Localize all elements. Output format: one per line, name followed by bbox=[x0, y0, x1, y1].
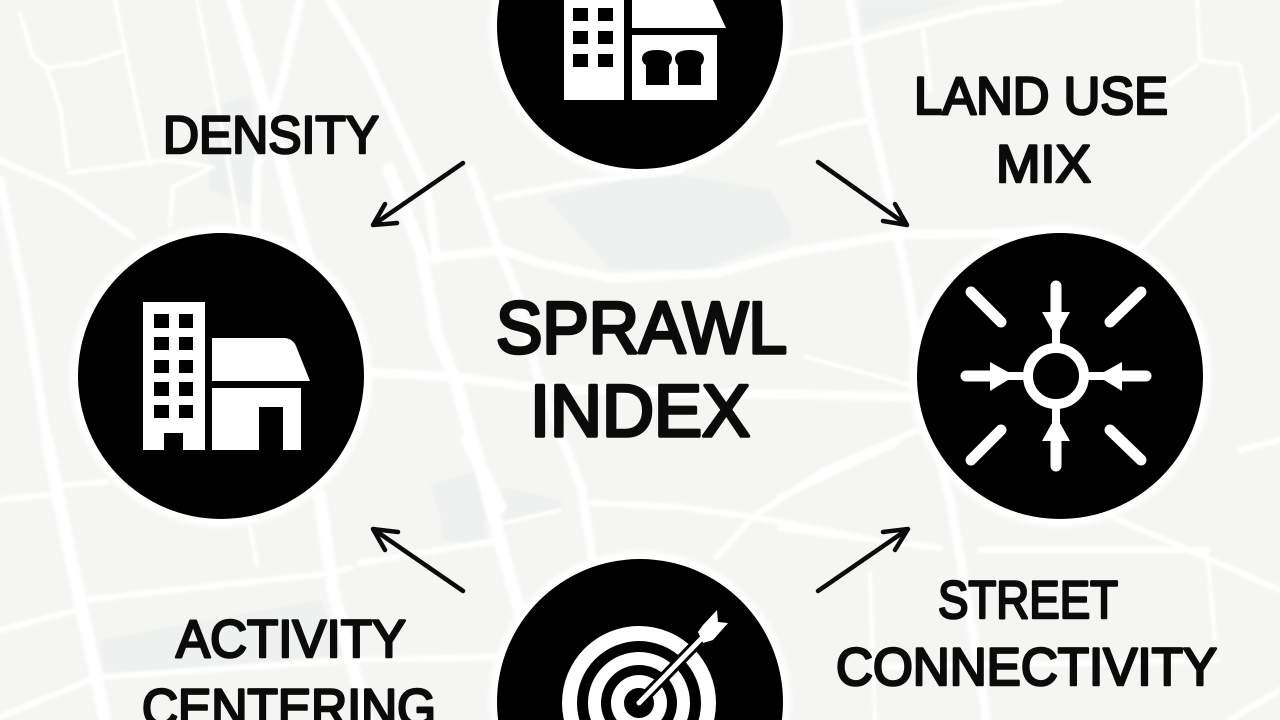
label: land use mix: LAND USE bbox=[914, 67, 1168, 126]
label: land use mix: MIX bbox=[996, 135, 1091, 194]
icon: tower and house bbox=[143, 302, 310, 450]
node: top circle (land use mix icon) bbox=[489, 0, 791, 177]
heading: Sprawl Index bbox=[496, 288, 787, 452]
node: right circle (street connectivity icon) bbox=[909, 225, 1211, 527]
icon: apartment building and bakery bbox=[564, 0, 726, 100]
label: street connectivity bbox=[836, 571, 1217, 697]
heading: Sprawl Index: INDEX bbox=[530, 371, 750, 452]
label: activity centering bbox=[142, 610, 436, 720]
label: street connectivity: STREET bbox=[938, 571, 1118, 630]
icon: target with arrow bbox=[562, 610, 728, 720]
node: left circle (density icon) bbox=[70, 225, 372, 527]
label: density: DENSITY bbox=[163, 106, 379, 165]
arrow: bottom to right bbox=[818, 529, 908, 591]
label: land use mix bbox=[914, 67, 1168, 194]
icon: roundabout with converging arrows bbox=[966, 286, 1146, 466]
label: activity centering: ACTIVITY bbox=[176, 610, 406, 669]
arrow: bottom to left bbox=[373, 529, 463, 591]
arrow: top to left bbox=[373, 163, 463, 225]
heading: Sprawl Index: SPRAWL bbox=[496, 288, 787, 369]
arrow: top to right bbox=[818, 162, 907, 225]
label: street connectivity: CONNECTIVITY bbox=[836, 638, 1217, 697]
node: bottom circle (activity centering icon) bbox=[489, 551, 791, 720]
